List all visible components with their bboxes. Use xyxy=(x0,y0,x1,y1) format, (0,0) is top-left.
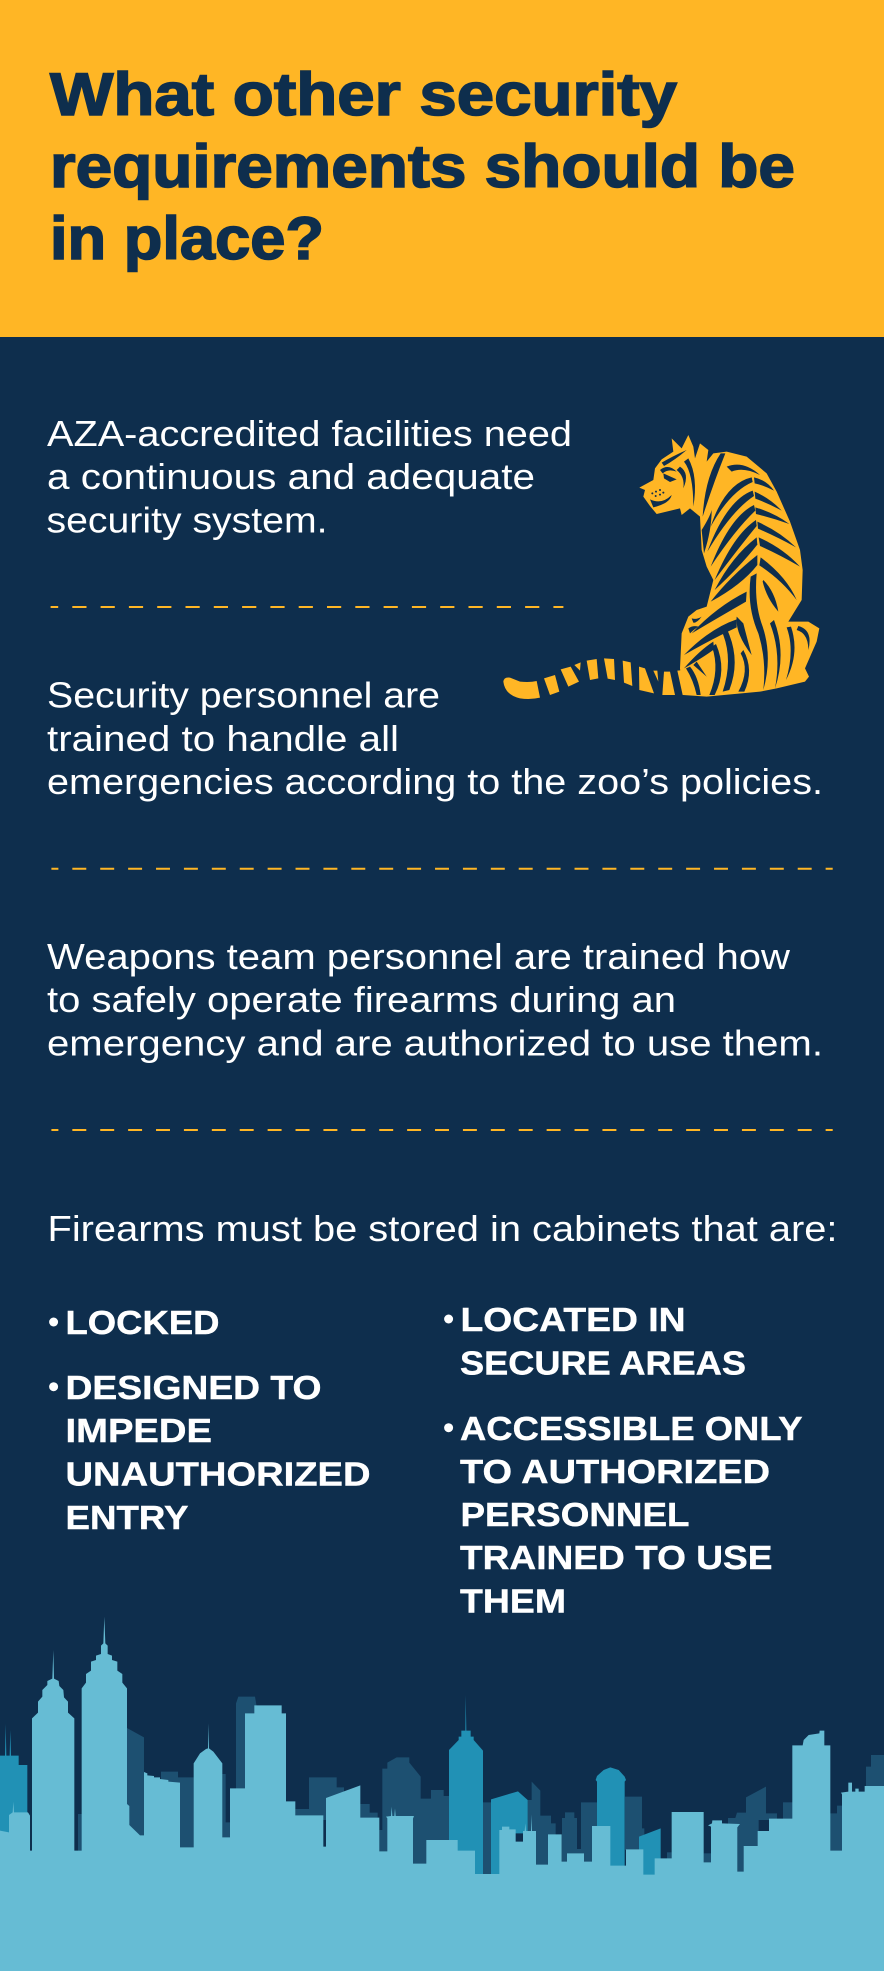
text block: weapons team: emergency and are authorized to use them. xyxy=(47,1022,823,1064)
skyline: left half xyxy=(0,1617,443,1971)
text block: security personnel: emergencies according to the zoo’s policies. xyxy=(47,761,823,802)
text block: continuous security system xyxy=(46,413,572,540)
title: in place? xyxy=(50,205,324,272)
tiger tail xyxy=(503,658,688,699)
text block: continuous security system: security system. xyxy=(46,500,328,540)
list: right column: SECURE AREAS xyxy=(460,1344,746,1382)
list: left column: IMPEDE xyxy=(66,1412,212,1449)
skyline: right half xyxy=(442,1695,884,1971)
text block: continuous security system: AZA-accredited facilities need xyxy=(47,413,572,454)
list: left column: LOCKED xyxy=(66,1304,220,1341)
list: right column: ACCESSIBLE ONLY xyxy=(460,1410,802,1447)
list: left column xyxy=(49,1304,370,1536)
list: right column: TRAINED TO USE xyxy=(460,1539,772,1576)
text block: security personnel xyxy=(47,674,823,802)
title xyxy=(50,61,795,272)
text block: security personnel: trained to handle all xyxy=(47,718,399,759)
tiger stripes xyxy=(650,450,810,695)
header panel xyxy=(0,0,884,337)
tiger body xyxy=(639,435,819,697)
text block: security personnel: Security personnel are xyxy=(47,674,440,716)
list: right column: LOCATED IN xyxy=(460,1301,686,1338)
list: right column: PERSONNEL xyxy=(460,1496,690,1533)
list: left column: UNAUTHORIZED xyxy=(66,1456,370,1492)
city skyline xyxy=(0,1617,884,1971)
list: left column: DESIGNED TO xyxy=(66,1369,322,1406)
text block: firearms storage lead-in: Firearms must be stored in cabinets that are: xyxy=(48,1208,838,1249)
text block: continuous security system: a continuous and adequate xyxy=(47,456,535,497)
title: requirements should be xyxy=(50,133,795,200)
list: right column xyxy=(444,1301,802,1620)
list: right column: TO AUTHORIZED xyxy=(460,1453,770,1490)
icon: sitting tiger looking back xyxy=(503,435,819,699)
text block: weapons team: to safely operate firearms during an xyxy=(47,979,676,1020)
title: What other security xyxy=(50,61,678,128)
list: right column: THEM xyxy=(460,1582,566,1620)
text block: weapons team xyxy=(47,936,823,1064)
list: left column: ENTRY xyxy=(66,1499,188,1536)
text block: weapons team: Weapons team personnel are trained how xyxy=(47,936,791,977)
